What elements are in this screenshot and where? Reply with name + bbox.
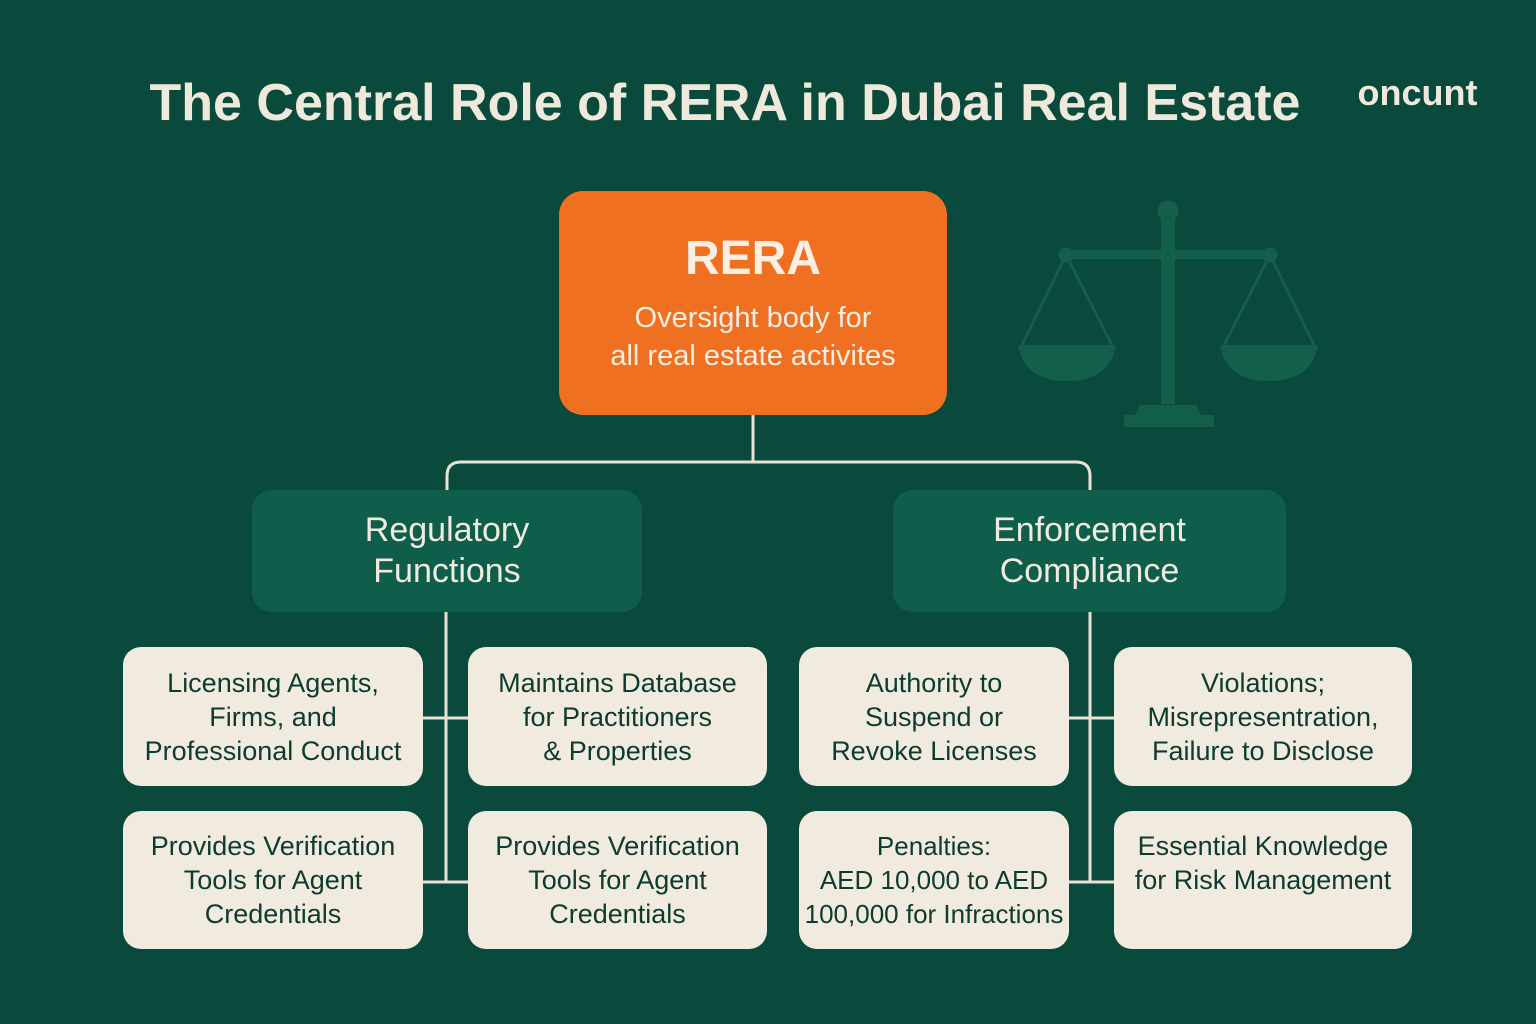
brand logo text: oncunt [1358, 72, 1477, 113]
box: essential knowledge: Essential Knowledge [1138, 831, 1388, 861]
panel: regulatory functions: Functions [373, 552, 521, 590]
RERA box: all real estate activites [610, 340, 896, 372]
RERA box: Oversight body for [635, 302, 871, 334]
box: essential knowledge [1114, 811, 1412, 949]
box: database: for Practitioners [523, 702, 712, 732]
box: verification 2: Credentials [549, 899, 686, 929]
box: authority: Suspend or [865, 702, 1003, 732]
icon: scales of justice [1018, 200, 1318, 427]
box: database: Maintains Database [498, 668, 737, 698]
panel: regulatory functions [252, 490, 642, 612]
title: The Central Role of RERA in Dubai Real Estate [150, 74, 1300, 132]
panel: regulatory functions: Regulatory [365, 511, 529, 549]
box: licensing: Professional Conduct [145, 736, 401, 766]
panel: enforcement compliance [893, 490, 1286, 612]
box: penalties [799, 811, 1069, 949]
box: violations: Failure to Disclose [1152, 736, 1374, 766]
box: authority: Authority to [866, 668, 1002, 698]
box: verification 2: Provides Verification [495, 831, 740, 861]
box: database: & Properties [543, 736, 692, 766]
box: violations [1114, 647, 1412, 786]
box: database [468, 647, 767, 786]
box: violations: Misrepresentration, [1147, 702, 1379, 732]
box: licensing: Firms, and [209, 702, 337, 732]
box: verification 1: Provides Verification [151, 831, 395, 861]
box: verification 1: Credentials [205, 899, 341, 929]
box: licensing: Licensing Agents, [167, 668, 379, 698]
RERA box [559, 191, 947, 415]
box: authority: Revoke Licenses [831, 736, 1037, 766]
box: authority [799, 647, 1069, 786]
box: licensing [123, 647, 423, 786]
panel: enforcement compliance: Enforcement [993, 511, 1186, 549]
box: penalties: 100,000 for Infractions [805, 899, 1063, 929]
box: verification 2: Tools for Agent [528, 865, 707, 895]
box: penalties: AED 10,000 to AED [820, 865, 1048, 895]
box: verification 1: Tools for Agent [184, 865, 362, 895]
RERA box: RERA [685, 232, 821, 285]
panel: enforcement compliance: Compliance [1000, 552, 1179, 590]
box: essential knowledge: for Risk Management [1135, 865, 1391, 895]
box: verification 1 [123, 811, 423, 949]
box: penalties: Penalties: [877, 831, 991, 861]
box: verification 2 [468, 811, 767, 949]
box: violations: Violations; [1201, 668, 1325, 698]
